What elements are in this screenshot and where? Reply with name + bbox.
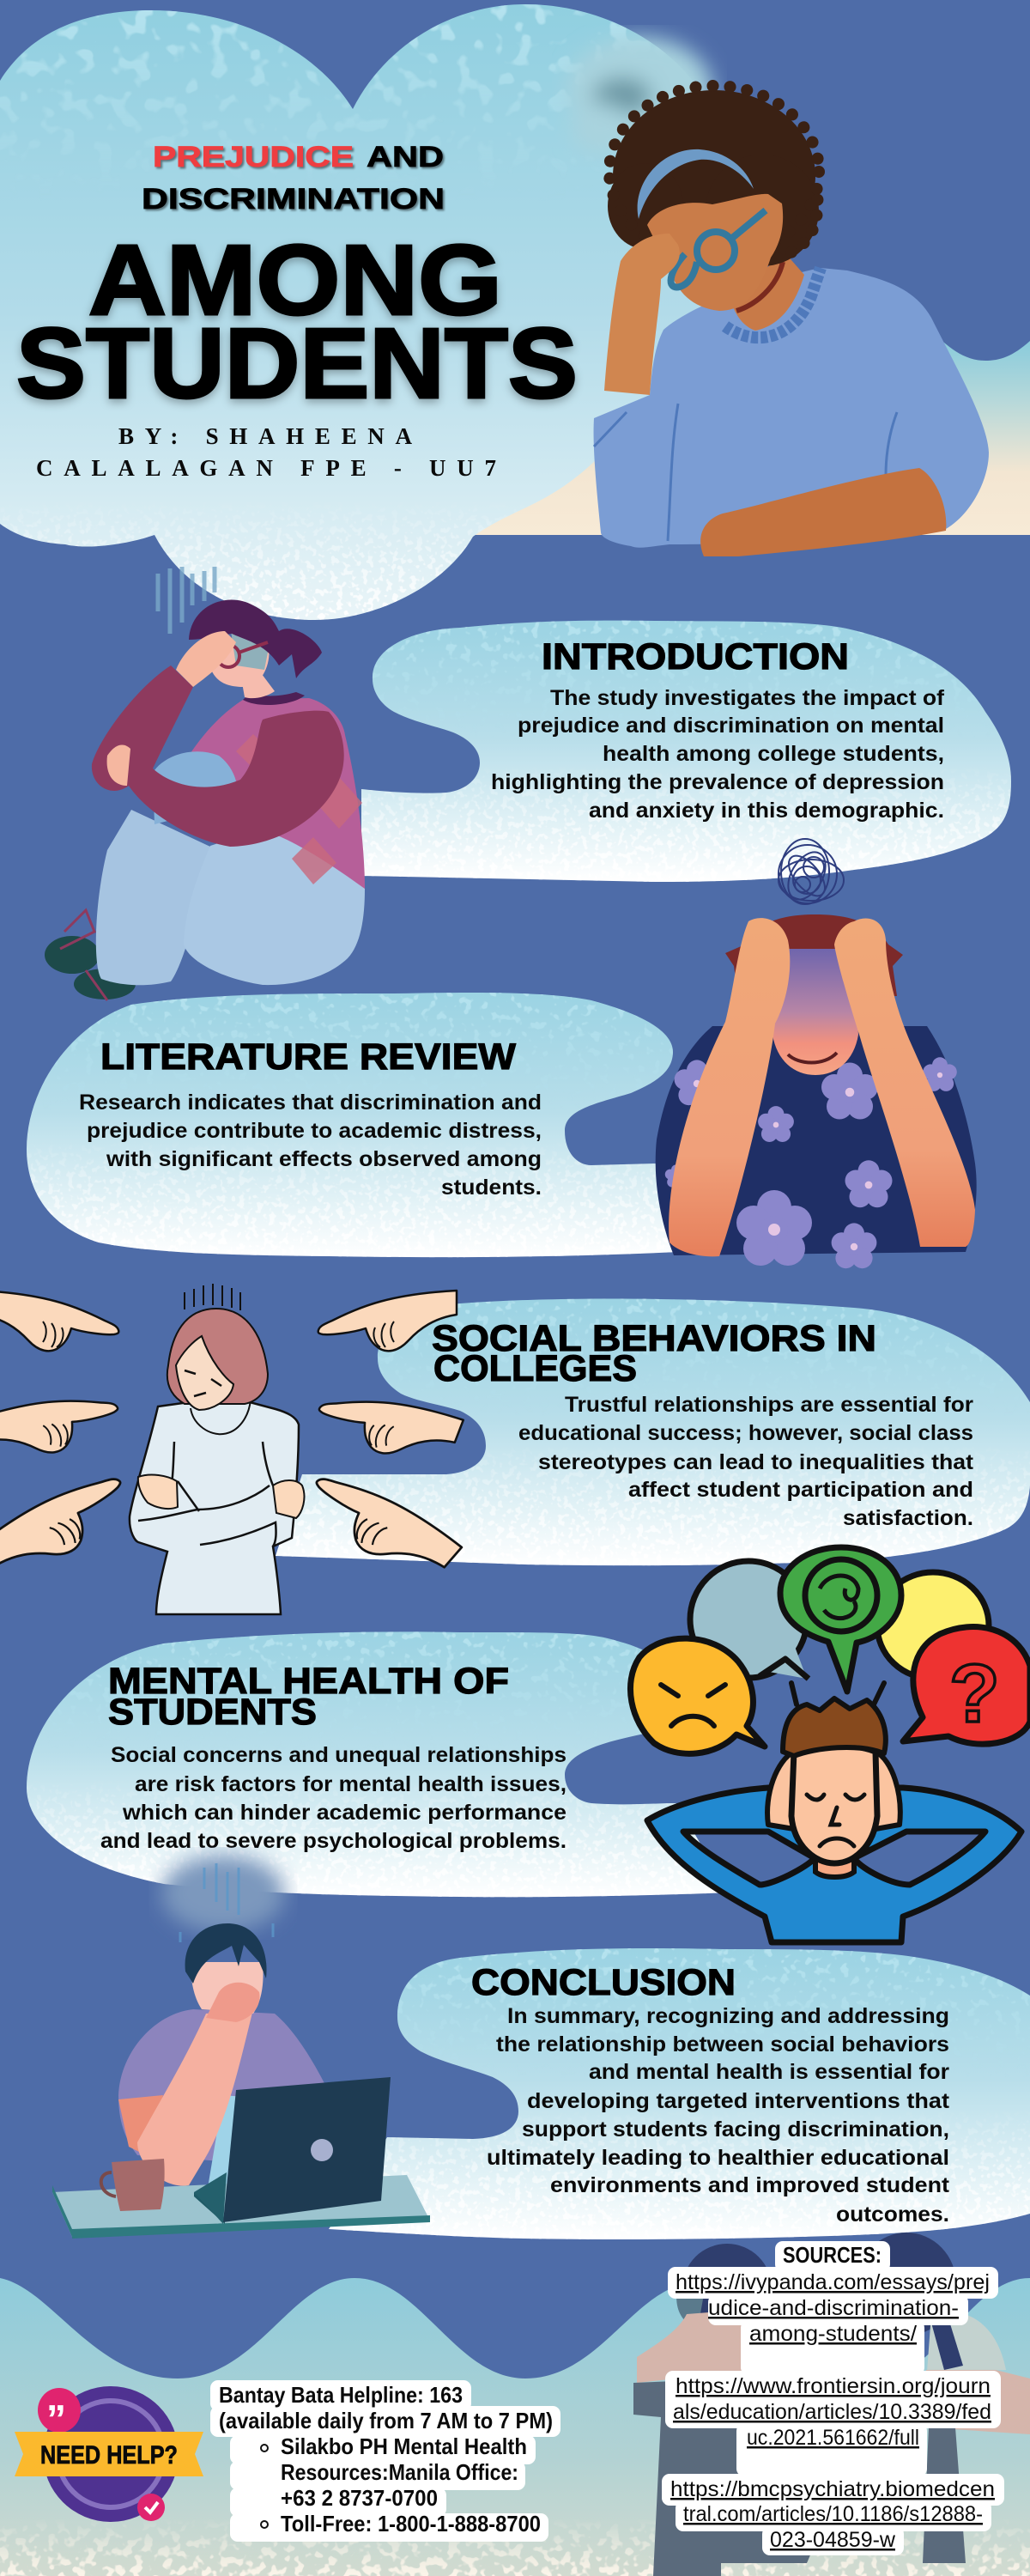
- text: conclusion body: In summary, recognizing and addressing: [507, 2004, 949, 2028]
- badge label: NEED HELP?: [40, 2441, 178, 2470]
- bubble: yellow: [877, 1572, 989, 1679]
- title: prejudice and discrimination: DISCRIMINATION: [142, 183, 445, 216]
- right arm: [926, 2370, 1030, 2434]
- text: introduction body: prejudice and discrimination on mental: [518, 714, 944, 738]
- face: [176, 1336, 233, 1410]
- illustration: sitting woman: [45, 567, 365, 1000]
- heading: literature review: LITERATURE REVIEW: [100, 1036, 516, 1078]
- raised arm: [137, 2009, 253, 2186]
- text: conclusion body: developing targeted interventions that: [527, 2089, 950, 2113]
- text block: sources: als/education/articles/10.3389/fed: [673, 2400, 991, 2424]
- neck: [730, 253, 804, 331]
- text: literature body: prejudice contribute to academic distress,: [87, 1119, 542, 1143]
- text block: helpline: Resources:Manila Office:: [281, 2459, 518, 2485]
- text block: sources: tral.com/articles/10.1186/s12888-: [683, 2502, 983, 2526]
- yellow banner: [15, 2432, 203, 2476]
- mouth: [788, 1053, 837, 1063]
- headband: [638, 149, 754, 219]
- panel: conclusion: [326, 1945, 1030, 2241]
- mug: [101, 2159, 165, 2211]
- title: among students: STUDENTS: [16, 307, 578, 419]
- face: [209, 638, 269, 687]
- illustration: two students behind sources: [633, 2233, 1030, 2576]
- hand: [107, 744, 130, 786]
- neck: [242, 674, 275, 698]
- bubble: red question: [903, 1627, 1030, 1744]
- hair: [185, 1923, 267, 1984]
- hair: [189, 599, 322, 678]
- face details: [185, 1370, 221, 1396]
- text: conclusion body: and mental health is essential for: [589, 2060, 949, 2084]
- rain lines: [158, 567, 215, 634]
- header cloud panel: [0, 0, 755, 627]
- shirt: [656, 1026, 977, 1255]
- text: mental health body: [100, 1743, 566, 1853]
- text: conclusion body: [487, 2004, 950, 2227]
- text: introduction body: [491, 686, 945, 823]
- illustration: woman in blue sweater: [566, 37, 989, 556]
- text: mental health body: are risk factors for mental health issues,: [135, 1772, 566, 1796]
- text block: sources: 023-04859-w: [770, 2528, 896, 2552]
- text block: sources: SOURCES:: [783, 2242, 882, 2268]
- body and arms: [647, 1788, 1021, 1942]
- heading: mental health: MENTAL HEALTH OF: [108, 1661, 509, 1702]
- text block: helpline: +63 2 8737-0700: [281, 2485, 438, 2511]
- raindrops: [180, 1863, 273, 1942]
- raised hand: [176, 631, 236, 687]
- title: prejudice and discrimination: AND: [367, 141, 444, 173]
- bubble: green: [780, 1547, 901, 1692]
- panel: mental health of students: [26, 1627, 738, 1902]
- text: literature body: Research indicates that discrimination and: [79, 1091, 542, 1115]
- shirt: [118, 2009, 330, 2164]
- byline: BY: SHAHEENA: [118, 423, 412, 449]
- collar: [243, 692, 305, 705]
- hands: [767, 1752, 900, 1829]
- heads: [682, 2244, 772, 2333]
- shoes: [45, 910, 136, 1000]
- face: [191, 1962, 264, 2014]
- text block: helpline: Toll-Free: 1-800-1-888-8700: [281, 2511, 541, 2537]
- text block: sources: uc.2021.561662/full: [747, 2426, 919, 2450]
- text: literature body: students.: [441, 1176, 542, 1200]
- rain cloud: [161, 1855, 285, 1932]
- worry lines: [185, 1284, 240, 1310]
- text: introduction body: highlighting the prevalence of depression: [491, 770, 944, 794]
- crossed arms: [138, 1442, 276, 1546]
- scribble: [779, 839, 844, 906]
- footer wave: [0, 2278, 1030, 2576]
- knee: [153, 751, 238, 824]
- hair: [783, 1698, 886, 1756]
- question mark: ?: [949, 1648, 1000, 1740]
- pink sweater: [189, 698, 365, 889]
- braid: [931, 2318, 963, 2370]
- heading: social behaviors: [432, 1318, 876, 1389]
- text block: helpline: Silakbo PH Mental Health: [281, 2433, 527, 2459]
- title: among students: AMONG: [88, 224, 502, 336]
- desk: [52, 2175, 430, 2237]
- face: [647, 194, 783, 311]
- text: conclusion body: support students facing discrimination,: [522, 2117, 949, 2142]
- purple disc: [43, 2386, 179, 2522]
- bubble: orange angry: [630, 1638, 765, 1753]
- text block: helpline: Bantay Bata Helpline: 163: [219, 2382, 463, 2408]
- text: mental health body: which can hinder academic performance: [122, 1801, 566, 1825]
- neck: [815, 1855, 854, 1877]
- head: [791, 1745, 877, 1863]
- text block: sources: https://ivypanda.com/essays/prej: [676, 2270, 990, 2294]
- text block: sources: https://bmcpsychiatry.biomedcen: [670, 2477, 995, 2501]
- collar: [191, 1400, 251, 1434]
- hair: [167, 1309, 268, 1404]
- illustration: man at laptop: [52, 1855, 430, 2239]
- hair: [725, 914, 903, 996]
- text: social behaviors body: satisfaction.: [843, 1506, 973, 1530]
- text block: sources: udice-and-discrimination-: [708, 2296, 959, 2320]
- glasses: [671, 210, 766, 287]
- illustration: man holding head: [656, 839, 977, 1268]
- text: social behaviors body: [518, 1393, 974, 1530]
- highlight boxes: [210, 2380, 560, 2542]
- crossed-arm hands: [138, 1475, 304, 1518]
- text: literature body: with significant effects observed among: [106, 1147, 542, 1171]
- text block: sources: [662, 2241, 1004, 2555]
- bubble: gray: [690, 1561, 809, 1679]
- highlight boxes: [662, 2241, 1004, 2555]
- lower forearm and hand: [700, 468, 946, 556]
- heading: mental health: [108, 1661, 509, 1733]
- title: prejudice and discrimination: PREJUDICE: [153, 141, 354, 173]
- right blouse: [927, 2312, 1006, 2372]
- byline: CALALAGAN FPE - UU7: [36, 455, 496, 481]
- smoke cloud: [566, 37, 712, 155]
- neck and face: [772, 949, 858, 1075]
- heading: social behaviors: COLLEGES: [433, 1348, 637, 1389]
- text: conclusion body: outcomes.: [836, 2202, 949, 2227]
- hands: [318, 1291, 457, 1351]
- heading: introduction: INTRODUCTION: [542, 636, 849, 677]
- panel: social behaviors in colleges: [275, 1292, 1030, 1567]
- text: mental health body: and lead to severe psychological problems.: [100, 1829, 566, 1853]
- dark sleeve arm: [92, 665, 344, 847]
- right skirt: [923, 2427, 966, 2563]
- text: conclusion body: ultimately leading to healthier educational: [487, 2146, 949, 2170]
- text block: helpline: (available daily from 7 AM to 7 PM): [219, 2408, 553, 2433]
- text: social behaviors body: educational success; however, social class: [518, 1421, 973, 1445]
- text: social behaviors body: affect student participation and: [628, 1478, 973, 1502]
- panel: literature review: [26, 987, 687, 1262]
- byline: [36, 423, 496, 481]
- beige speckle: [0, 2527, 1030, 2576]
- left leg: [96, 810, 210, 985]
- pink quote circle: [38, 2388, 81, 2433]
- text: introduction body: The study investigates the impact of: [550, 686, 945, 710]
- raised forearm and hand: [604, 234, 680, 395]
- right leg: [184, 824, 365, 985]
- text: introduction body: health among college students,: [603, 742, 944, 766]
- laptop: [194, 2077, 391, 2224]
- text: conclusion body: the relationship between social behaviors: [496, 2032, 949, 2057]
- title block: [16, 141, 578, 481]
- heading: mental health: STUDENTS: [108, 1692, 317, 1733]
- text: mental health body: Social concerns and unequal relationships: [111, 1743, 566, 1767]
- text: social behaviors body: stereotypes can lead to inequalities that: [538, 1450, 974, 1474]
- glasses: [217, 642, 268, 667]
- illustration: woman surrounded by pointing hands: [0, 1284, 464, 1614]
- badge: need help: [15, 2386, 203, 2522]
- right arm: [834, 918, 975, 1247]
- sweater collar: [725, 268, 821, 337]
- title: among students: [16, 224, 578, 419]
- check circle: [137, 2494, 165, 2521]
- illustration: stressed man with speech bubbles: [630, 1547, 1030, 1942]
- text block: sources: https://www.frontiersin.org/journ: [676, 2374, 991, 2398]
- hand on mouth: [206, 1983, 260, 2022]
- panel: introduction: [360, 618, 1021, 884]
- text block: sources: among-students/: [749, 2322, 917, 2346]
- text: introduction body: and anxiety in this demographic.: [589, 799, 944, 823]
- title: prejudice and discrimination: [142, 141, 445, 216]
- heading: conclusion: CONCLUSION: [471, 1962, 736, 2003]
- text: conclusion body: environments and improved student: [550, 2173, 950, 2197]
- text: literature body: [79, 1091, 542, 1200]
- left coat: [633, 2379, 821, 2576]
- heading: social behaviors: SOCIAL BEHAVIORS IN: [432, 1318, 876, 1359]
- sweater argyle: [236, 734, 362, 884]
- torso: [130, 1402, 299, 1614]
- text block: helpline: [210, 2380, 560, 2542]
- header backdrop band: [154, 326, 1030, 535]
- quote marks: ”: [46, 2397, 66, 2441]
- flowers: [665, 1057, 957, 1268]
- left arm: [669, 918, 790, 1256]
- text: social behaviors body: Trustful relationships are essential for: [565, 1393, 973, 1417]
- dash marks: [791, 1683, 884, 1704]
- bullets: [261, 2445, 268, 2528]
- face details: [807, 1795, 864, 1846]
- curly hair: [608, 86, 819, 266]
- sweater: [594, 268, 989, 548]
- left hair and face: [676, 2294, 704, 2323]
